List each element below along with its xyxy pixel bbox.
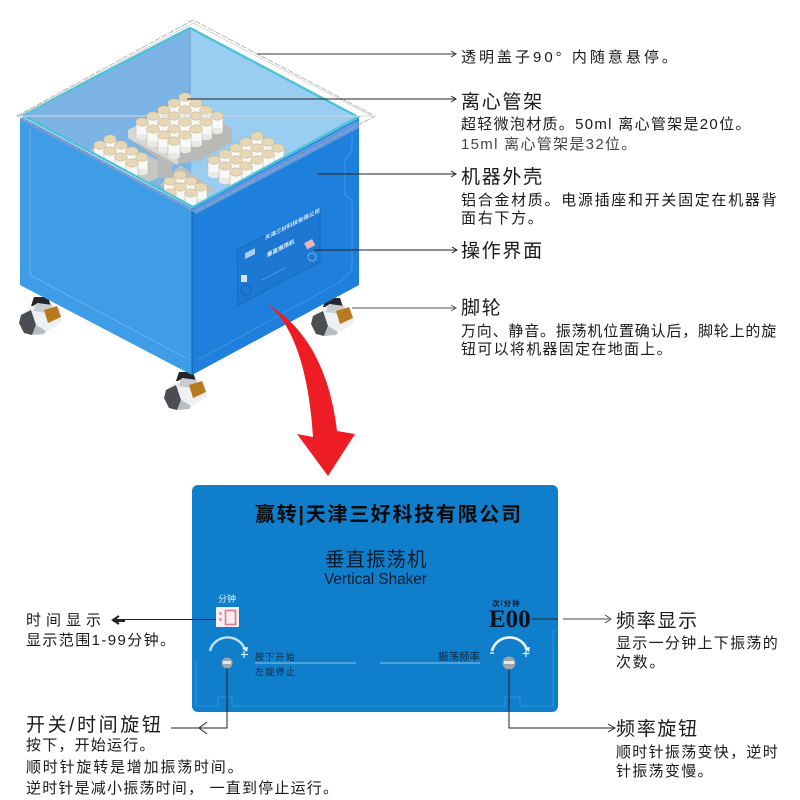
switch line one: 按下，开始运行。 — [26, 737, 156, 754]
callout: housing — [461, 167, 778, 227]
leader: rack — [187, 96, 456, 102]
switch line three: 逆时针是减小振荡时间， 一直到停止运行。 — [26, 780, 339, 797]
leader: time display — [113, 616, 216, 624]
operation panel on housing: 天津三好科技有限公司 — [265, 206, 320, 242]
callout: frequency display — [616, 610, 779, 671]
control panel — [192, 485, 558, 712]
start label: 按下开始 — [255, 652, 296, 662]
knob description: 顺时针振荡变快，逆时 — [616, 744, 779, 761]
callout: tube rack — [461, 92, 752, 153]
time description: 显示范围1-99分钟。 — [26, 632, 176, 649]
rack heading: 离心管架 — [461, 92, 544, 113]
centrifuge tube racks — [90, 93, 285, 211]
leader: caster — [352, 305, 456, 311]
rack description: 超轻微泡材质。50ml 离心管架是20位。 — [461, 116, 752, 133]
timer unit: 分钟 — [218, 594, 236, 604]
panel centre lines — [255, 662, 480, 664]
rack: bottom — [160, 165, 215, 206]
frequency description: 显示一分钟上下振荡的 — [616, 635, 779, 652]
frequency heading: 频率显示 — [616, 611, 699, 632]
left dial arc — [210, 637, 248, 658]
housing right face — [192, 118, 359, 375]
knob heading: 频率旋钮 — [616, 719, 699, 740]
right knob — [502, 656, 516, 670]
leader: lid — [257, 51, 456, 57]
leader: frequency knob — [509, 669, 615, 732]
leader: operation panel — [314, 247, 457, 253]
caster: right — [311, 298, 354, 336]
callout: operation panel: 操作界面 — [461, 241, 544, 262]
housing description line two: 面右下方。 — [461, 210, 545, 227]
rack: right — [205, 132, 285, 190]
leader: housing — [318, 171, 456, 177]
rack description line two: 15ml 离心管架是32位。 — [461, 136, 638, 153]
caster heading: 脚轮 — [461, 298, 502, 319]
panel product name: 垂直振荡机 — [325, 549, 428, 571]
lid rim — [17, 20, 375, 214]
leader: switch knob — [171, 668, 227, 734]
caster description line two: 钮可以将机器固定在地面上。 — [461, 341, 673, 358]
rack: left — [90, 134, 158, 182]
callout: caster — [461, 298, 777, 358]
red arrow — [267, 304, 355, 476]
switch heading: 开关/时间旋钮 — [26, 715, 163, 736]
transparent lid interior — [22, 28, 358, 207]
panel English name: Vertical Shaker — [324, 571, 427, 588]
callout: frequency knob — [616, 718, 779, 780]
left knob — [222, 658, 232, 668]
time heading: 时间显示 — [26, 612, 106, 629]
callout: transparent lid: 透明盖子90° 内随意悬停。 — [461, 49, 680, 66]
frequency description line two: 次数。 — [616, 654, 666, 671]
operation panel on housing: 垂直振荡机 — [267, 237, 295, 259]
timer display — [216, 607, 239, 627]
knob description line two: 针振荡变慢。 — [616, 763, 714, 780]
right dial arc — [490, 637, 530, 657]
callout: time display — [26, 612, 176, 649]
housing heading: 机器外壳 — [461, 167, 544, 188]
frequency label: 振荡频率 — [438, 651, 480, 663]
operation panel on housing — [237, 206, 320, 305]
caster description: 万向、静音。振荡机位置确认后，脚轮上的旋 — [461, 323, 777, 340]
housing left face — [20, 118, 192, 375]
panel title: 赢转|天津三好科技有限公司 — [255, 504, 523, 526]
callout: switch knob — [26, 715, 339, 797]
caster: left — [19, 297, 62, 335]
rack: centre — [128, 93, 232, 178]
stop label: 左旋停止 — [255, 667, 296, 677]
machine illustration — [17, 20, 375, 410]
housing description: 铝合金材质。电源插座和开关固定在机器背 — [461, 192, 778, 209]
leader: frequency display — [532, 615, 611, 623]
switch line two: 顺时针旋转是增加振荡时间。 — [26, 759, 244, 776]
leader lines — [113, 51, 615, 734]
caster: front — [164, 372, 207, 410]
frequency display: E00 — [489, 606, 531, 633]
frequency unit: 次/分钟 — [492, 599, 521, 608]
